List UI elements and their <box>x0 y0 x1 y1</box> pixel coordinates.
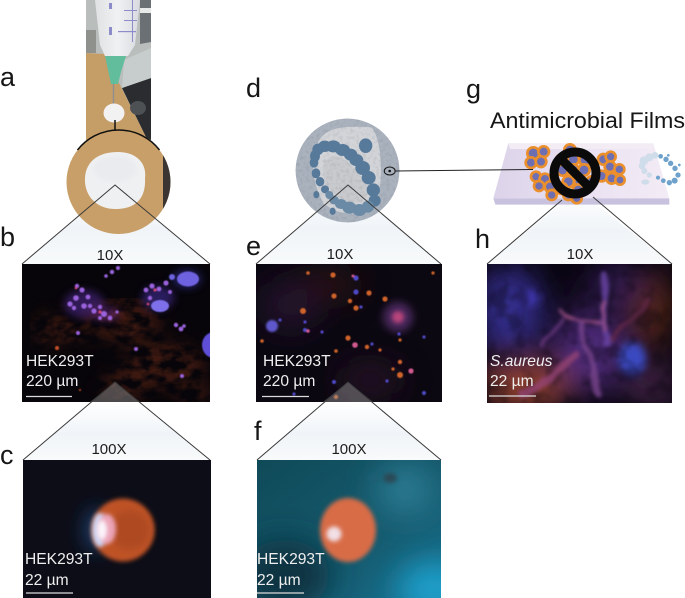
caption f: 22 µm <box>257 572 301 589</box>
label d: d <box>246 73 261 103</box>
caption b: HEK293T <box>26 353 94 370</box>
magnification label f: 100X <box>331 441 367 458</box>
zoom triangle: b to c <box>23 382 210 460</box>
label f: f <box>254 416 262 446</box>
caption f: HEK293T <box>257 551 325 568</box>
caption e <box>262 353 331 396</box>
panel g: antimicrobial film schematic <box>493 143 681 205</box>
panel c: 100X HEK293T micrograph <box>23 460 211 598</box>
caption b: 220 µm <box>26 373 78 390</box>
zoom lines g to h <box>487 197 672 264</box>
heading: Antimicrobial Films: Antimicrobial Films <box>490 108 685 133</box>
callout line from dish to film <box>384 167 533 175</box>
panel a: syringe photo <box>86 0 151 140</box>
panel f: 100X HEK293T micrograph with bioink <box>257 460 441 598</box>
caption c: HEK293T <box>25 551 93 568</box>
label g: g <box>466 74 481 104</box>
panel d: printed petri dish photo <box>296 118 400 222</box>
label a: a <box>0 62 16 92</box>
caption c: 22 µm <box>25 572 69 589</box>
caption h: S.aureus <box>490 353 553 370</box>
panel b: 10X HEK293T micrograph <box>22 264 226 403</box>
caption b <box>26 353 94 396</box>
panel a: inset circle of printed scaffold <box>66 130 173 234</box>
caption e: HEK293T <box>263 353 331 370</box>
zoom triangle: g to h <box>487 190 672 264</box>
zoom lines a to b <box>22 185 210 264</box>
zoom triangle: a to b <box>22 185 210 264</box>
film slide <box>493 143 669 205</box>
fading bacteria ring <box>639 152 681 185</box>
magnification label c: 100X <box>91 441 127 458</box>
zoom triangle: d to e <box>256 185 441 264</box>
prohibition symbol <box>554 152 596 194</box>
zoom lines d to e <box>256 185 441 264</box>
label e: e <box>246 231 261 261</box>
panel e: 10X HEK293T micrograph with bioink <box>256 264 442 402</box>
label b: b <box>0 222 15 252</box>
magnification label h: 10X <box>567 246 593 263</box>
label c: c <box>0 440 14 470</box>
bacteria cluster <box>526 144 625 203</box>
magnification label b: 10X <box>97 247 123 264</box>
magnification label e: 10X <box>327 246 353 263</box>
label h: h <box>475 224 490 254</box>
caption e: 220 µm <box>263 373 315 390</box>
caption h: 22 µm <box>490 373 534 390</box>
caption h <box>489 353 553 396</box>
caption c <box>25 551 93 593</box>
zoom triangle: e to f <box>257 382 441 460</box>
caption f <box>257 551 325 593</box>
panel h: 10X S. aureus micrograph <box>478 264 676 407</box>
connector: syringe to inset <box>114 120 116 131</box>
